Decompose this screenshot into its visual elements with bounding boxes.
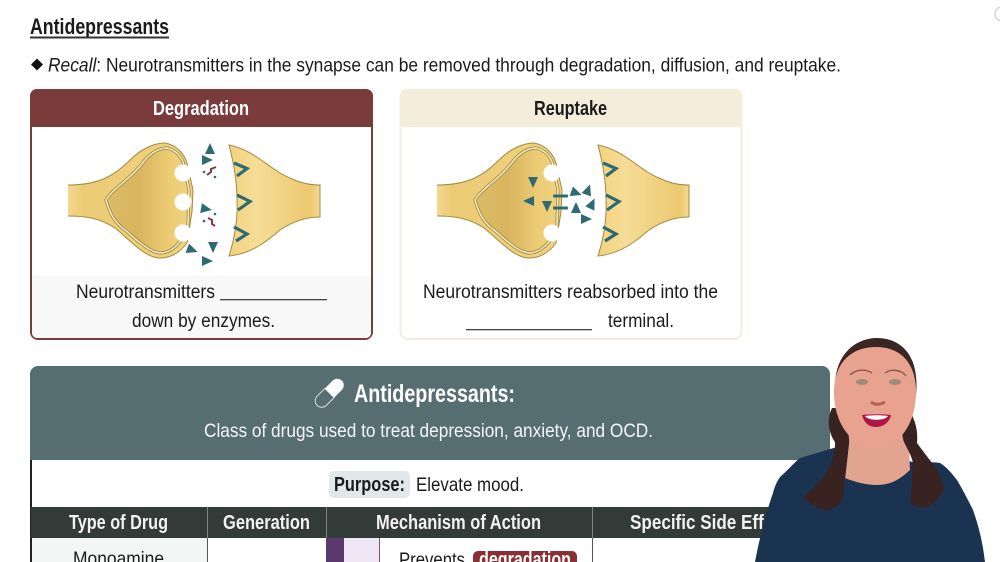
degradation caption: down by enzymes. bbox=[132, 310, 275, 332]
table first row bbox=[32, 538, 593, 562]
reuptake synapse diagram bbox=[437, 143, 689, 258]
panel heading: Antidepressants: bbox=[354, 380, 515, 408]
icon: pill capsule bbox=[313, 376, 346, 410]
table header row: Type of Drug bbox=[69, 512, 168, 534]
purpose line bbox=[329, 471, 524, 498]
presenter hair back bbox=[835, 338, 916, 395]
degradation caption bbox=[76, 281, 327, 332]
title: Antidepressants bbox=[30, 14, 169, 39]
degradation caption background bbox=[32, 275, 371, 338]
table frame left border bbox=[30, 460, 32, 562]
presenter left braid bbox=[803, 408, 849, 510]
panel: reuptake bbox=[400, 89, 742, 339]
degradation heading bbox=[30, 89, 373, 127]
degradation heading: Degradation bbox=[153, 98, 249, 120]
icon: corner control bbox=[995, 7, 1000, 21]
panel: antidepressants definition bbox=[30, 366, 830, 460]
purpose line: Purpose: bbox=[334, 474, 405, 496]
panel description: Class of drugs used to treat depression, anxiety, and OCD. bbox=[204, 420, 653, 442]
table header row: Generation bbox=[223, 512, 310, 534]
reuptake heading bbox=[400, 89, 742, 127]
panel: degradation bbox=[30, 89, 373, 339]
reuptake caption: terminal. bbox=[608, 310, 674, 332]
presenter face bbox=[834, 347, 916, 448]
table header row: Mechanism of Action bbox=[376, 512, 541, 534]
reuptake caption bbox=[423, 281, 718, 332]
degradation caption: Neurotransmitters bbox=[76, 281, 215, 303]
table header row bbox=[31, 507, 798, 538]
presenter right braid bbox=[902, 415, 943, 508]
table header row: Specific Side Effects bbox=[630, 512, 798, 534]
presenter shirt bbox=[755, 447, 985, 562]
presenter bbox=[755, 338, 985, 562]
degradation synapse diagram bbox=[68, 143, 320, 266]
presenter eyes and brows bbox=[850, 370, 906, 404]
presenter neck bbox=[845, 425, 910, 485]
presenter smile bbox=[862, 414, 891, 427]
reuptake caption: Neurotransmitters reabsorbed into the bbox=[423, 281, 718, 303]
recall bullet text: Recall: Neurotransmitters in the synapse can be removed through degradation, diffusion, and reuptake. bbox=[48, 54, 841, 76]
purpose line: Elevate mood. bbox=[416, 474, 524, 496]
reuptake heading: Reuptake bbox=[534, 98, 607, 120]
